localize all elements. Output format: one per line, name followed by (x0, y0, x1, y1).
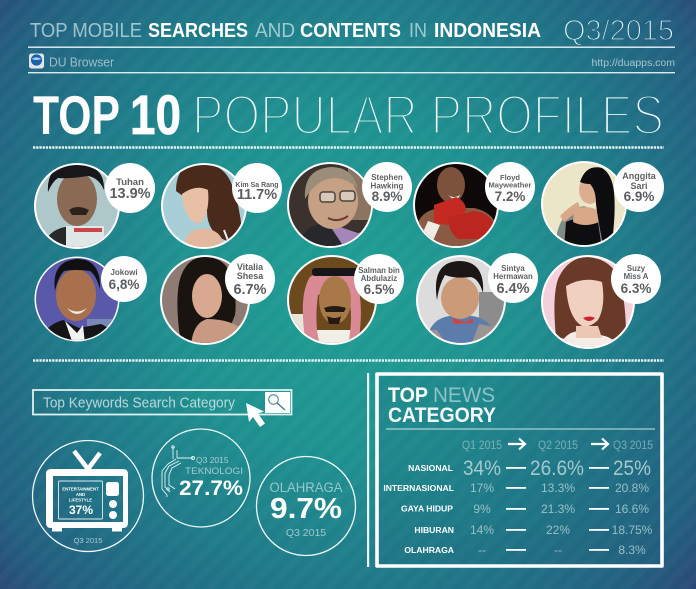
TV screen (58, 481, 102, 519)
profile: Anggita Sari (539, 159, 664, 250)
TV screen: AND (76, 492, 85, 497)
row: olahraga: 8.3% (618, 543, 646, 557)
header title: AND (255, 20, 295, 42)
label: Sintya Hermawan: 6.4% (496, 281, 530, 297)
photo: Kim Sa Rang (163, 165, 245, 247)
row: olahraga: -- (554, 543, 562, 557)
label: Salman bin Abdulaziz (354, 254, 404, 304)
header title: INDONESIA (434, 20, 541, 42)
photo: Jokowi (36, 258, 118, 340)
row: hiburan (414, 523, 653, 537)
label: Salman bin Abdulaziz: 6.5% (364, 282, 394, 297)
label: Jokowi: 6,8% (109, 277, 139, 292)
TV buttons (106, 482, 119, 519)
table header: Q3 2015 (613, 440, 653, 452)
date: Q3/2015: Q3/2015 (563, 15, 674, 47)
search box (33, 390, 292, 427)
label: Jokowi (101, 256, 147, 302)
label: Tuhan (105, 163, 155, 213)
icon: DU Browser logo (29, 54, 44, 68)
header rules (28, 46, 675, 73)
profile: Salman bin Abdulaziz (287, 254, 404, 345)
label: Jokowi: Jokowi (110, 268, 138, 277)
photo: Anggita Sari (543, 163, 625, 245)
row: hiburan: 14% (470, 523, 494, 537)
side rule (367, 373, 369, 567)
profile: Stephen Hawking (285, 160, 412, 250)
brand: DU Browser: DU Browser (49, 54, 115, 70)
label: Tuhan: Tuhan (116, 177, 144, 188)
photo: Stephen Hawking (289, 164, 371, 246)
label: Anggita Sari (614, 162, 664, 212)
teknologi label: TEKNOLOGI (185, 466, 243, 477)
keyword: olahraga circle (256, 456, 356, 556)
row: gaya hidup: 16.6% (615, 502, 649, 516)
label: Kim Sa Rang: 11.7% (237, 187, 277, 203)
arrow: q2 to q3 (591, 438, 608, 450)
icon: circuit (162, 446, 194, 497)
label: Vitalia Shesa: Vitalia (237, 262, 264, 272)
label: Suzy Miss A: Suzy (627, 264, 646, 273)
label: Vitalia Shesa: 6.7% (233, 282, 267, 298)
label: Stephen Hawking (362, 162, 412, 212)
row: nasional: 25% (613, 456, 651, 480)
row: internasional (383, 481, 649, 495)
row: internasional: 17% (470, 481, 494, 495)
row: gaya hidup: 9% (473, 502, 491, 516)
label: Vitalia Shesa (225, 254, 275, 304)
label: Kim Sa Rang (232, 163, 282, 213)
olahraga date: Q3 2015 (286, 527, 326, 539)
row: gaya hidup: GAYA HIDUP (401, 504, 453, 514)
search box label: Top Keywords Search Category (43, 396, 236, 412)
row: hiburan: 22% (546, 523, 570, 537)
table header: Q1 2015 (462, 440, 502, 452)
photo: Salman bin Abdulaziz (287, 255, 377, 345)
row: internasional: 13.3% (541, 481, 575, 495)
label: Floyd Mayweather: 7.2% (495, 189, 525, 204)
news heading: CATEGORY (388, 403, 496, 427)
header title: TOP MOBILE (30, 20, 142, 42)
label: Vitalia Shesa: Shesa (237, 271, 264, 281)
photo: Sintya Hermawan (416, 255, 506, 345)
panel: top news category (377, 374, 662, 566)
profile: Tuhan (32, 161, 155, 251)
photo: Vitalia Shesa (160, 255, 250, 345)
row: olahraga: OLAHRAGA (404, 545, 454, 555)
photo: Suzy Miss A (541, 255, 635, 349)
row: hiburan: 18.75% (612, 523, 653, 537)
row: internasional: INTERNASIONAL (383, 483, 454, 493)
main heading: 10 (130, 83, 181, 146)
row: gaya hidup: 21.3% (541, 502, 575, 516)
label: Stephen Hawking: Stephen (371, 173, 403, 182)
row: gaya hidup (401, 502, 649, 516)
keyword: entertainment TV circle (32, 440, 144, 552)
label: Suzy Miss A (611, 254, 661, 304)
label: Stephen Hawking: Hawking (371, 182, 404, 190)
label: Sintya Hermawan: Sintya (501, 264, 525, 273)
TV screen: 37% (69, 503, 93, 517)
icon: magnifier (265, 392, 290, 413)
header title (30, 20, 541, 42)
icon: TV antenna (74, 451, 100, 469)
label: Suzy Miss A: 6.3% (621, 281, 651, 296)
teknologi value: 27.7% (179, 477, 243, 500)
label: Stephen Hawking: 8.9% (372, 189, 402, 204)
dotted divider top (33, 146, 664, 149)
arrow: q1 to q2 (508, 438, 525, 450)
table header (462, 438, 653, 452)
label: Anggita Sari: Anggita (622, 171, 657, 181)
main heading (33, 94, 660, 135)
news heading: TOP (388, 384, 428, 407)
row: nasional (408, 456, 651, 480)
main heading: TOP (33, 84, 120, 146)
row: nasional: 34% (463, 456, 501, 480)
row: olahraga: -- (478, 543, 486, 557)
row: nasional: NASIONAL (408, 463, 453, 473)
label: Anggita Sari: Sari (630, 181, 648, 191)
label: Kim Sa Rang: Kim Sa Rang (235, 182, 279, 189)
news heading: NEWS (433, 384, 495, 407)
row: hiburan: HIBURAN (414, 525, 454, 535)
header title: IN (409, 20, 427, 42)
row: internasional: 20.8% (615, 481, 649, 495)
profile: Jokowi (32, 254, 147, 344)
profile: Suzy Miss A (541, 254, 661, 349)
photo: Tuhan (36, 165, 118, 247)
profile: Sintya Hermawan (416, 253, 538, 345)
table header: Q2 2015 (538, 440, 578, 452)
row: nasional: 26.6% (530, 456, 584, 480)
icon: TV body (46, 469, 128, 532)
photo: Floyd Mayweather (415, 164, 497, 246)
header title: CONTENTS (300, 20, 401, 42)
olahraga label: OLAHRAGA (270, 480, 342, 495)
label: Salman bin Abdulaziz: Abdulaziz (361, 274, 397, 283)
label: Floyd Mayweather (485, 162, 535, 212)
keyword: teknologi circle (152, 429, 250, 527)
profile: Kim Sa Rang (159, 161, 282, 251)
news heading (388, 384, 496, 427)
profile: Vitalia Shesa (160, 254, 275, 345)
label: Tuhan: 13.9% (109, 186, 151, 202)
label: Floyd Mayweather: Floyd (500, 173, 520, 182)
url: http://duapps.com (592, 57, 675, 69)
label: Sintya Hermawan (488, 253, 538, 303)
dotted divider bottom (33, 359, 664, 362)
icon: cursor arrow (246, 403, 265, 427)
label: Sintya Hermawan: Hermawan (493, 272, 533, 281)
profile: Floyd Mayweather (411, 160, 535, 250)
TV date: Q3 2015 (74, 536, 102, 545)
row: olahraga (404, 543, 646, 557)
TV screen: LIFESTYLE (69, 498, 92, 502)
header title: SEARCHES (148, 20, 248, 42)
TV screen: ENTERTAINMENT (62, 486, 99, 492)
label: Anggita Sari: 6.9% (624, 189, 654, 204)
teknologi date: Q3 2015 (196, 455, 229, 465)
label: Salman bin Abdulaziz: Salman bin (358, 266, 400, 275)
olahraga value: 9.7% (270, 493, 342, 525)
label: Floyd Mayweather: Mayweather (489, 180, 532, 190)
label: Suzy Miss A: Miss A (624, 272, 649, 281)
